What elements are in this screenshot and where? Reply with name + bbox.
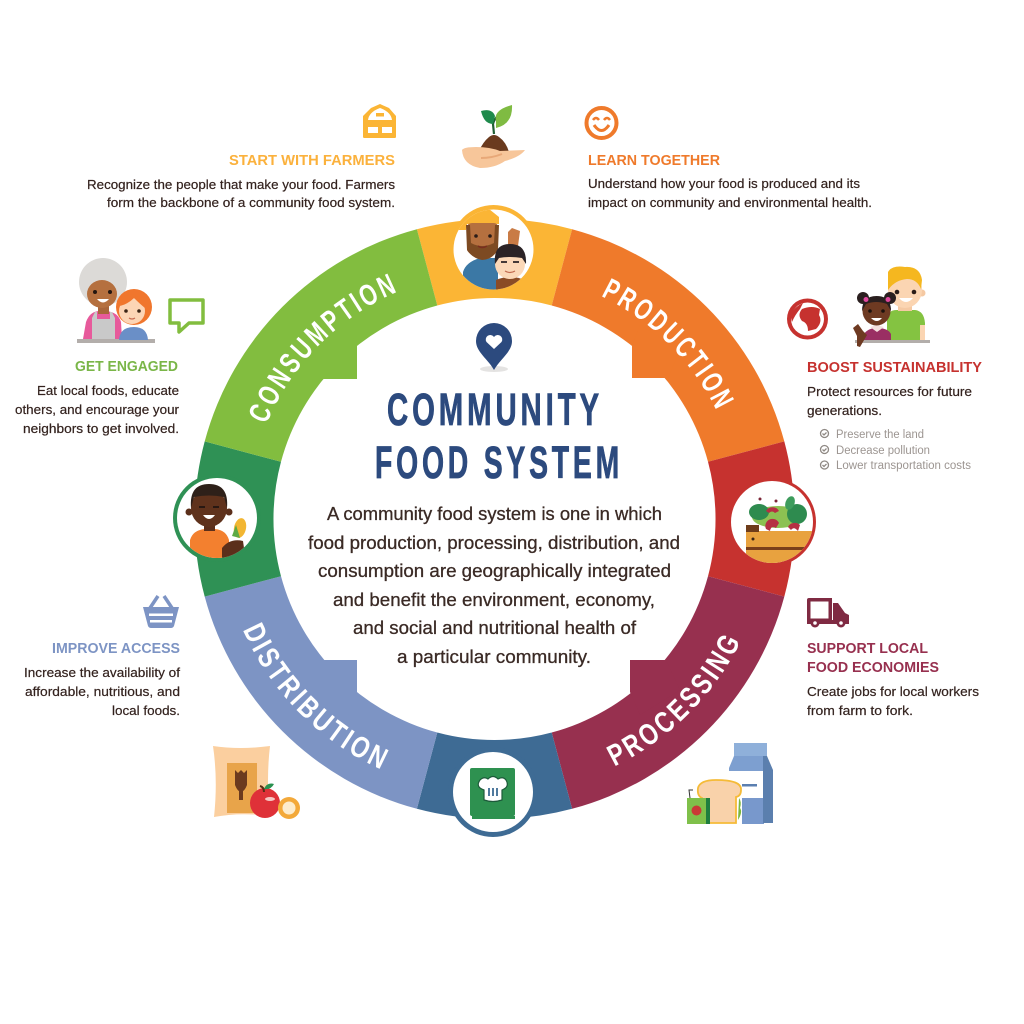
text: learn together: impact on community and environmental health. bbox=[588, 195, 872, 210]
illustration: grandmother and granddaughter bbox=[77, 258, 155, 343]
central description text: consumption are geographically integrated bbox=[318, 560, 671, 581]
icon: smiling face bbox=[586, 108, 616, 138]
title bbox=[375, 384, 623, 488]
checklist bbox=[820, 429, 971, 472]
heading: start with farmers: START WITH FARMERS bbox=[229, 153, 395, 169]
text: support local food economies: from farm to fork. bbox=[807, 703, 913, 718]
ring segment: production bbox=[552, 229, 784, 462]
illustration: grain sack and fruit bbox=[213, 746, 300, 819]
text: improve access: affordable, nutritious, and bbox=[25, 684, 180, 699]
title: COMMUNITY bbox=[387, 384, 603, 435]
text: improve access: Increase the availability of bbox=[24, 665, 180, 680]
central description text: A community food system is one in which bbox=[327, 503, 662, 524]
heading: support local food economies: FOOD ECONOMIES bbox=[807, 660, 939, 676]
label: distribution: DISTRIBUTION bbox=[243, 622, 388, 769]
heading: boost sustainability: BOOST SUSTAINABILITY bbox=[807, 360, 982, 376]
panel: get engaged bbox=[15, 258, 203, 436]
panel: support local food economies bbox=[807, 598, 980, 718]
ring segment: community engagement bbox=[173, 441, 281, 597]
text: support local food economies bbox=[807, 684, 980, 718]
icon: globe bbox=[787, 298, 828, 340]
checklist: Preserve the land bbox=[836, 429, 924, 441]
text: get engaged: Eat local foods, educate bbox=[37, 383, 179, 398]
text: boost sustainability: generations. bbox=[807, 403, 882, 418]
label: processing: PROCESSING bbox=[606, 636, 738, 766]
icon: shopping basket bbox=[143, 596, 179, 628]
text: start with farmers bbox=[87, 177, 396, 210]
illustration: milk carton, sandwich and juice box bbox=[687, 743, 773, 824]
heading: support local food economies bbox=[807, 641, 939, 676]
ring segment: food literacy bbox=[417, 732, 572, 837]
illustration: chef cookbook bbox=[453, 752, 533, 832]
illustration: boy holding corn bbox=[177, 478, 257, 560]
panel: boost sustainability bbox=[787, 267, 982, 472]
central description text bbox=[308, 503, 680, 667]
central description text: and benefit the environment, economy, bbox=[333, 589, 655, 610]
illustration: two children bbox=[853, 267, 930, 347]
heading: support local food economies: SUPPORT LOCAL bbox=[807, 641, 928, 657]
label: consumption: CONSUMPTION bbox=[250, 274, 396, 421]
checklist: Lower transportation costs bbox=[836, 460, 971, 472]
text: improve access bbox=[24, 665, 180, 718]
text: get engaged: others, and encourage your bbox=[15, 402, 180, 417]
heading: improve access: IMPROVE ACCESS bbox=[52, 641, 180, 657]
label: production: PRODUCTION bbox=[602, 278, 734, 409]
heading: learn together: LEARN TOGETHER bbox=[588, 153, 721, 169]
central description text: a particular community. bbox=[397, 646, 591, 667]
ring segment: boost sustainability bbox=[708, 441, 816, 597]
icon: map pin with heart bbox=[476, 323, 512, 372]
illustration: seedling in hand bbox=[462, 105, 525, 168]
panel: start with farmers bbox=[87, 104, 396, 210]
title: FOOD SYSTEM bbox=[375, 437, 623, 488]
central description text: food production, processing, distribution, and bbox=[308, 532, 680, 553]
text: learn together bbox=[588, 176, 872, 210]
ring segment: processing bbox=[552, 576, 784, 809]
heading: get engaged: GET ENGAGED bbox=[75, 359, 178, 375]
text: support local food economies: Create jobs for local workers bbox=[807, 684, 980, 699]
ring segment: distribution bbox=[205, 576, 437, 809]
illustration: crate of vegetables bbox=[731, 481, 813, 563]
ring segment: consumption bbox=[205, 229, 437, 462]
ring segment: start with farmers bbox=[417, 205, 572, 306]
text: get engaged: neighbors to get involved. bbox=[23, 421, 179, 436]
central description text: and social and nutritional health of bbox=[353, 617, 637, 638]
text: learn together: Understand how your food is produced and its bbox=[588, 176, 861, 191]
text: boost sustainability bbox=[807, 384, 972, 418]
icon: truck bbox=[807, 598, 849, 628]
text: improve access: local foods. bbox=[112, 703, 180, 718]
text: boost sustainability: Protect resources for future bbox=[807, 384, 972, 399]
food system ring bbox=[173, 205, 816, 837]
illustration: farmer and child bbox=[450, 205, 534, 290]
text: get engaged bbox=[15, 383, 180, 436]
panel: learn together bbox=[586, 108, 872, 210]
text: start with farmers: form the backbone of a community food system. bbox=[107, 195, 395, 210]
icon: barn bbox=[363, 104, 396, 138]
panel: improve access bbox=[24, 596, 180, 718]
checklist: Decrease pollution bbox=[836, 445, 930, 457]
icon: chat bubble bbox=[170, 300, 203, 332]
text: start with farmers: Recognize the people that make your food. Farmers bbox=[87, 177, 396, 192]
